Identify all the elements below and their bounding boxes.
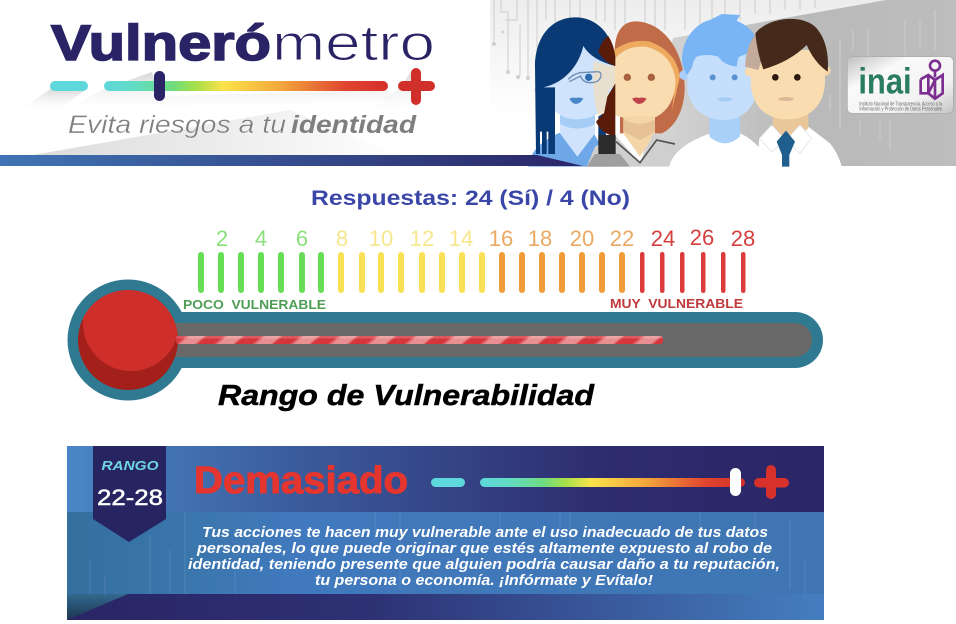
scale numbers: 8 bbox=[336, 226, 348, 251]
scale numbers bbox=[216, 225, 755, 251]
person: blue woman bbox=[528, 17, 615, 167]
description text bbox=[188, 525, 780, 589]
tagline: identidad bbox=[291, 111, 417, 139]
level heading: Demasiado bbox=[194, 460, 408, 502]
range badge: RANGO bbox=[102, 458, 158, 473]
logo: inai bbox=[847, 57, 953, 113]
scale numbers: 18 bbox=[528, 226, 552, 251]
range badge: 22-28 bbox=[97, 485, 163, 510]
thermometer bulb bbox=[78, 290, 178, 390]
responses heading: Respuestas: 24 (Sí) / 4 (No) bbox=[311, 187, 630, 210]
bottom strip bbox=[67, 594, 824, 620]
icon: group of four people bbox=[528, 14, 953, 167]
label: poco vulnerable: POCO VULNERABLE bbox=[183, 297, 326, 312]
scale numbers: 24 bbox=[651, 226, 675, 251]
scale numbers: 26 bbox=[690, 225, 714, 250]
scale numbers: 2 bbox=[216, 226, 228, 251]
logo title bbox=[51, 15, 435, 71]
header floor shadow bbox=[33, 110, 400, 155]
scale numbers: 14 bbox=[449, 226, 473, 251]
scale numbers: 12 bbox=[410, 226, 434, 251]
scale numbers: 22 bbox=[610, 226, 634, 251]
tagline: Evita riesgos a tu bbox=[68, 111, 286, 139]
range badge bbox=[93, 446, 166, 542]
scale numbers: 10 bbox=[369, 226, 393, 251]
label: muy vulnerable: MUY VULNERABLE bbox=[610, 296, 743, 311]
scale numbers: 20 bbox=[570, 226, 594, 251]
scale numbers: 28 bbox=[731, 226, 755, 251]
description text: tu persona o economía. ¡Infórmate y Evítalo! bbox=[315, 573, 653, 589]
person: red-haired woman bbox=[587, 21, 685, 167]
person: blue man bbox=[669, 14, 773, 167]
hair overlap lower bbox=[598, 135, 616, 154]
description text: personales, lo que puede originar que estés altamente expuesto al robo de bbox=[196, 541, 772, 557]
chart title: Rango de Vulnerabilidad bbox=[218, 380, 595, 412]
slider shadows bbox=[20, 70, 420, 112]
description text: Tus acciones te hacen muy vulnerable ante el uso inadecuado de tus datos bbox=[202, 525, 768, 541]
logo: inai: inai bbox=[858, 60, 912, 101]
logo title: metro bbox=[272, 15, 435, 71]
scale numbers: 6 bbox=[296, 226, 308, 251]
banner slider bbox=[431, 465, 789, 499]
scale ticks bbox=[198, 252, 746, 293]
header slider bbox=[50, 68, 435, 105]
scale numbers: 4 bbox=[255, 226, 267, 251]
header band bbox=[0, 155, 583, 166]
person: brown-haired man bbox=[745, 19, 842, 167]
circuit background bbox=[490, 0, 956, 166]
circuit texture bbox=[90, 512, 805, 594]
logo title: Vulneró bbox=[51, 15, 271, 71]
thermometer bbox=[68, 275, 823, 400]
result banner bbox=[67, 446, 824, 620]
header panel bbox=[0, 0, 956, 167]
hair overlap bbox=[596, 36, 615, 135]
description text: identidad, teniendo presente que alguien podría causar daño a tu reputación, bbox=[188, 557, 780, 573]
tagline bbox=[68, 111, 417, 139]
mercury column bbox=[176, 336, 663, 344]
scale numbers: 16 bbox=[489, 226, 513, 251]
